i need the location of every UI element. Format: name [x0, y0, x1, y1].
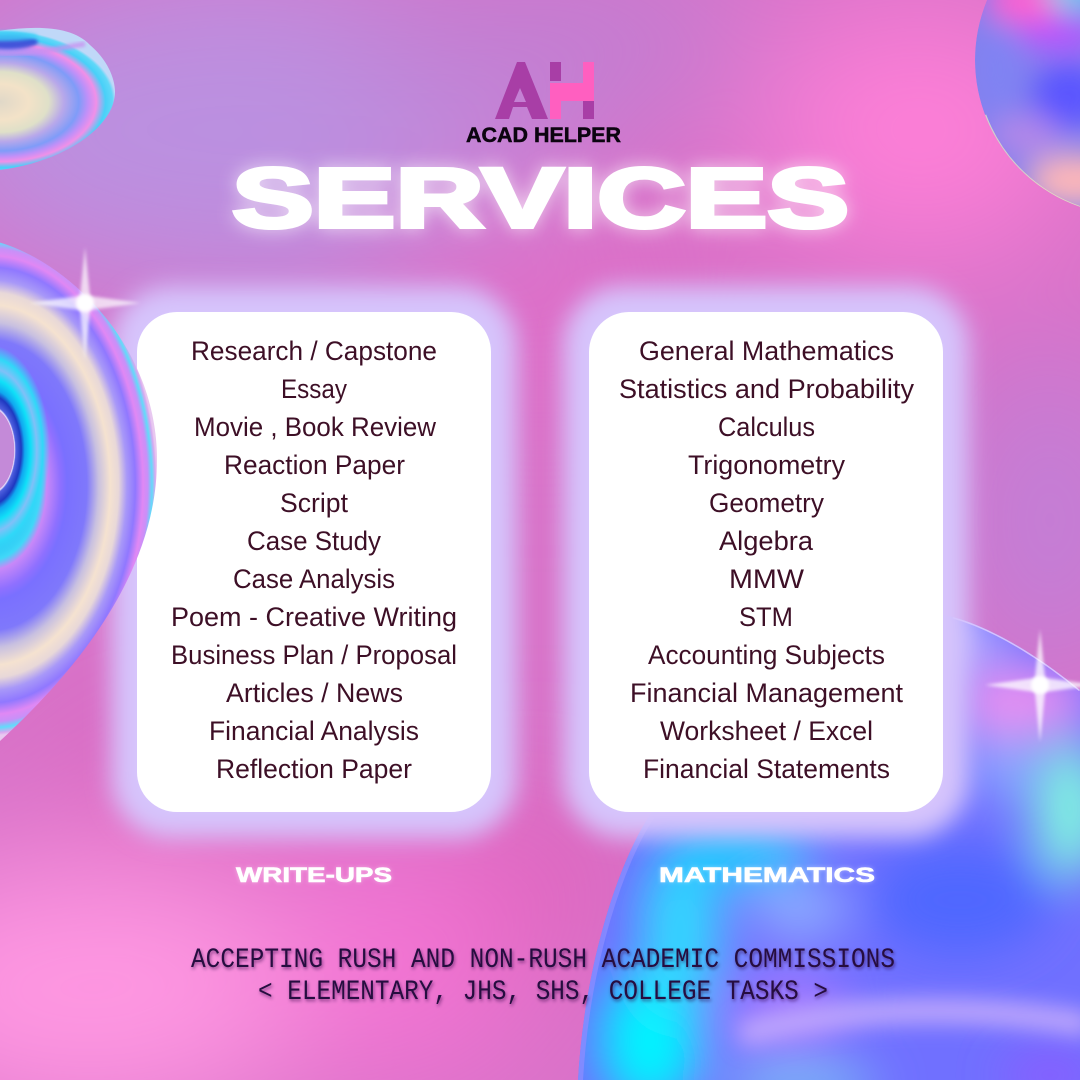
panel: mathematics list: [589, 312, 943, 812]
footer text: [191, 945, 895, 1008]
panel: mathematics list: Financial Statements: [643, 754, 890, 784]
panel: mathematics list: Trigonometry: [688, 450, 845, 480]
decoration: top-right iridescent sphere: [975, 0, 1080, 215]
panel: mathematics list: MMW: [729, 564, 805, 594]
panel: write-ups list: Reaction Paper: [224, 450, 405, 480]
footer text: < ELEMENTARY, JHS, SHS, COLLEGE TASKS >: [258, 977, 828, 1008]
panel: mathematics list: Calculus: [718, 412, 815, 442]
panel: write-ups list: Research / Capstone: [191, 336, 437, 366]
panel: mathematics list: Statistics and Probability: [619, 374, 914, 404]
panel: mathematics list: General Mathematics: [639, 336, 894, 366]
panel: write-ups list: Essay: [281, 374, 347, 404]
panel: mathematics list: Accounting Subjects: [648, 640, 885, 670]
panel: mathematics list: STM: [739, 602, 793, 632]
panel: write-ups list: Case Study: [247, 526, 381, 556]
title: SERVICES: [232, 151, 849, 245]
panel: write-ups list: [137, 312, 491, 812]
panel: mathematics list: Algebra: [719, 526, 814, 556]
decoration: top-left iridescent blob: [0, 28, 115, 171]
panel: mathematics list: Worksheet / Excel: [660, 716, 873, 746]
decoration: bottom-right iridescent sphere: [570, 600, 1080, 1080]
panel: write-ups list: Reflection Paper: [216, 754, 412, 784]
label: write-ups: WRITE-UPS: [236, 863, 392, 887]
footer text: ACCEPTING RUSH AND NON-RUSH ACADEMIC COMMISSIONS: [191, 945, 895, 976]
panel: mathematics list: Financial Management: [630, 678, 903, 708]
icon: sparkle left: [30, 247, 140, 360]
logo: AH mark and name: [466, 62, 621, 147]
logo: AH mark and name: ACAD HELPER: [466, 124, 621, 147]
decoration: left iridescent ring: [0, 242, 157, 741]
label: mathematics: MATHEMATICS: [659, 863, 875, 887]
panel: write-ups list: Movie , Book Review: [194, 412, 436, 442]
panel: mathematics list: Geometry: [709, 488, 824, 518]
panel: write-ups list: Financial Analysis: [209, 716, 419, 746]
icon: sparkle right: [985, 629, 1080, 742]
panel glow: mathematics: [563, 286, 969, 838]
panel: write-ups list: Poem - Creative Writing: [171, 602, 457, 632]
panel: write-ups list: Script: [280, 488, 348, 518]
panel: write-ups list: Articles / News: [226, 678, 403, 708]
panel: write-ups list: Business Plan / Proposal: [171, 640, 457, 670]
panel: write-ups list: Case Analysis: [233, 564, 395, 594]
panel glow: write-ups: [111, 286, 517, 838]
